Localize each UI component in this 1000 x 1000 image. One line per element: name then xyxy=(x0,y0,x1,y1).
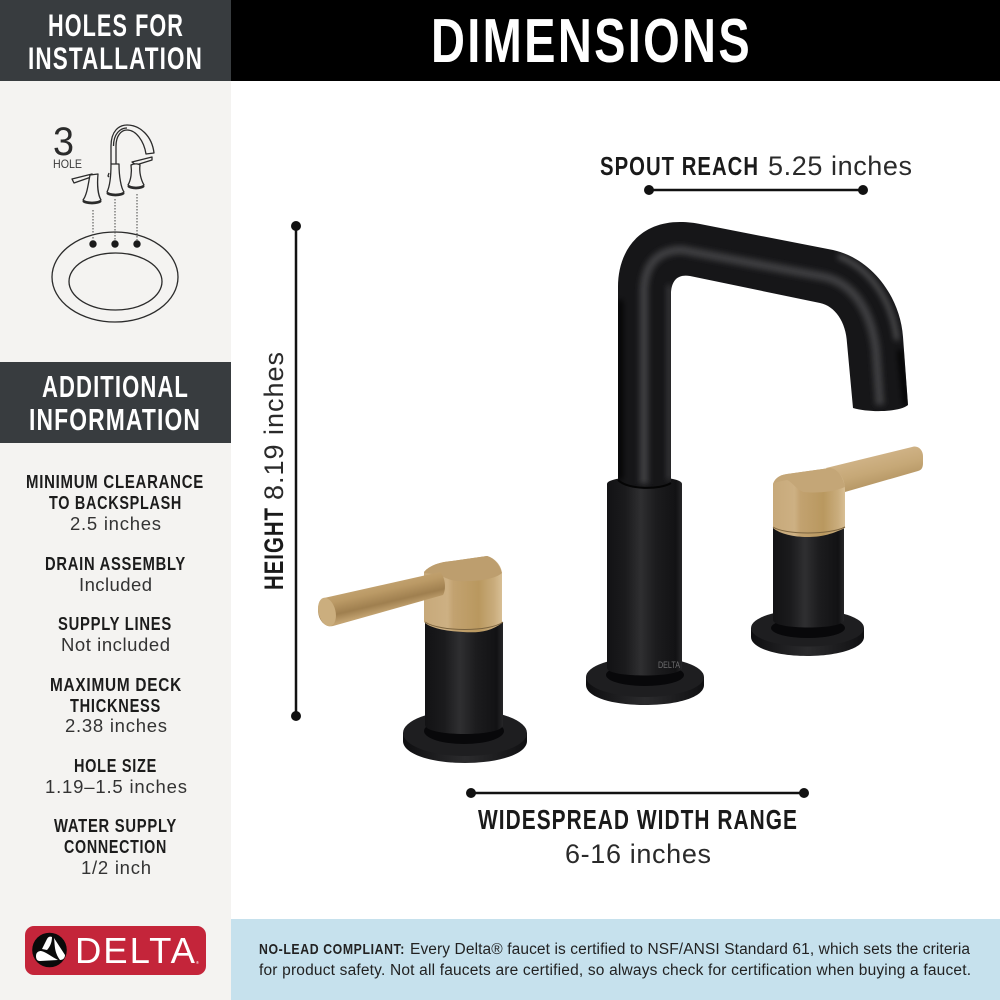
spec: drain assembly: DRAIN ASSEMBLY xyxy=(45,553,186,574)
spec: minimum clearance: MINIMUM CLEARANCE xyxy=(26,471,204,492)
spec: minimum clearance: TO BACKSPLASH xyxy=(49,492,182,513)
panel: left sidebar xyxy=(0,0,231,1000)
spec: water supply connection xyxy=(54,815,177,878)
spec: maximum deck thickness xyxy=(50,674,182,736)
dimension: height: 8.19 inches xyxy=(259,352,289,500)
panel: no-lead compliant note: for product safety. Not all faucets are certified, so always check for certification when buying a faucet. xyxy=(259,962,971,979)
spec: hole size: 1.19–1.5 inches xyxy=(45,776,187,797)
spout shading xyxy=(620,250,906,484)
spec: supply lines: SUPPLY LINES xyxy=(58,613,172,634)
spec: water supply connection: WATER SUPPLY xyxy=(54,815,177,836)
label: 3 hole: HOLE xyxy=(53,157,82,171)
gold and black seam xyxy=(425,622,503,630)
label: 3 hole: 3 xyxy=(53,120,74,164)
label: 3 hole xyxy=(53,120,82,171)
dimension: spout reach: 5.25 inches xyxy=(768,151,912,181)
dotted guides xyxy=(93,194,137,240)
dimension: widespread width range xyxy=(466,788,809,869)
dimension: height: HEIGHT xyxy=(259,507,289,590)
icon: 3 hole sink diagram xyxy=(52,120,178,322)
text block: additional information list xyxy=(26,471,204,878)
dimension: widespread width range: WIDESPREAD WIDTH RANGE xyxy=(478,804,798,835)
faucet: right handle xyxy=(751,447,923,656)
header: additional information: ADDITIONAL xyxy=(42,370,189,404)
logo: delta: ® xyxy=(196,960,199,965)
black body xyxy=(773,526,844,628)
small faucet line art xyxy=(72,125,154,203)
spec: minimum clearance xyxy=(26,471,204,534)
spec: maximum deck thickness: MAXIMUM DECK xyxy=(50,674,182,695)
header: additional information: INFORMATION xyxy=(29,403,201,437)
gold lever xyxy=(826,447,923,492)
deck disc xyxy=(403,710,527,763)
spout tube xyxy=(618,222,908,488)
spec: water supply connection: 1/2 inch xyxy=(81,857,151,878)
logo: delta: DELTA xyxy=(75,930,196,971)
collar ring xyxy=(618,480,671,488)
cap top face xyxy=(424,556,502,581)
header: holes for installation xyxy=(0,0,231,81)
dimension: spout reach: SPOUT REACH xyxy=(600,153,759,181)
spec: hole size: HOLE SIZE xyxy=(74,755,157,776)
spout body cylinder xyxy=(607,477,682,676)
panel: no-lead compliant note: NO-LEAD COMPLIANT: xyxy=(259,941,405,958)
dimension: height xyxy=(259,221,301,721)
black body xyxy=(425,622,503,734)
spec: maximum deck thickness: 2.38 inches xyxy=(65,715,167,736)
spec: minimum clearance: 2.5 inches xyxy=(70,513,161,534)
faucet: spout xyxy=(586,222,908,705)
delta engraving: DELTA xyxy=(658,660,680,670)
header: additional information xyxy=(0,362,231,443)
gold lever xyxy=(318,572,445,626)
spec: drain assembly xyxy=(45,553,186,595)
dimension: spout reach xyxy=(600,151,912,195)
spec: supply lines xyxy=(58,613,172,655)
dimension: widespread width range: 6-16 inches xyxy=(565,839,711,869)
logo: delta xyxy=(25,926,206,975)
gold handle cap xyxy=(424,556,502,632)
gold handle cap xyxy=(773,468,845,537)
faucet: left handle xyxy=(315,556,527,763)
spout base disc xyxy=(586,657,704,705)
spec: maximum deck thickness: THICKNESS xyxy=(70,695,161,716)
panel: no-lead compliant note: Every Delta® faucet is certified to NSF/ANSI Standard 61, which sets the criteria xyxy=(410,941,970,958)
gold and black seam xyxy=(773,527,845,533)
header: holes for installation: INSTALLATION xyxy=(28,40,203,76)
deck disc xyxy=(751,610,864,656)
spec: hole size xyxy=(45,755,187,797)
panel: no-lead compliant note xyxy=(231,919,1000,1000)
spec: supply lines: Not included xyxy=(61,634,170,655)
spec: water supply connection: CONNECTION xyxy=(64,836,167,857)
lever end cap xyxy=(315,596,339,628)
spec: drain assembly: Included xyxy=(79,574,152,595)
header: holes for installation: HOLES FOR xyxy=(48,7,184,43)
header: dimensions xyxy=(231,0,1000,81)
header: dimensions: DIMENSIONS xyxy=(431,7,752,76)
sink basin xyxy=(52,232,178,322)
cap top face xyxy=(773,468,845,492)
mounting holes xyxy=(89,240,141,248)
